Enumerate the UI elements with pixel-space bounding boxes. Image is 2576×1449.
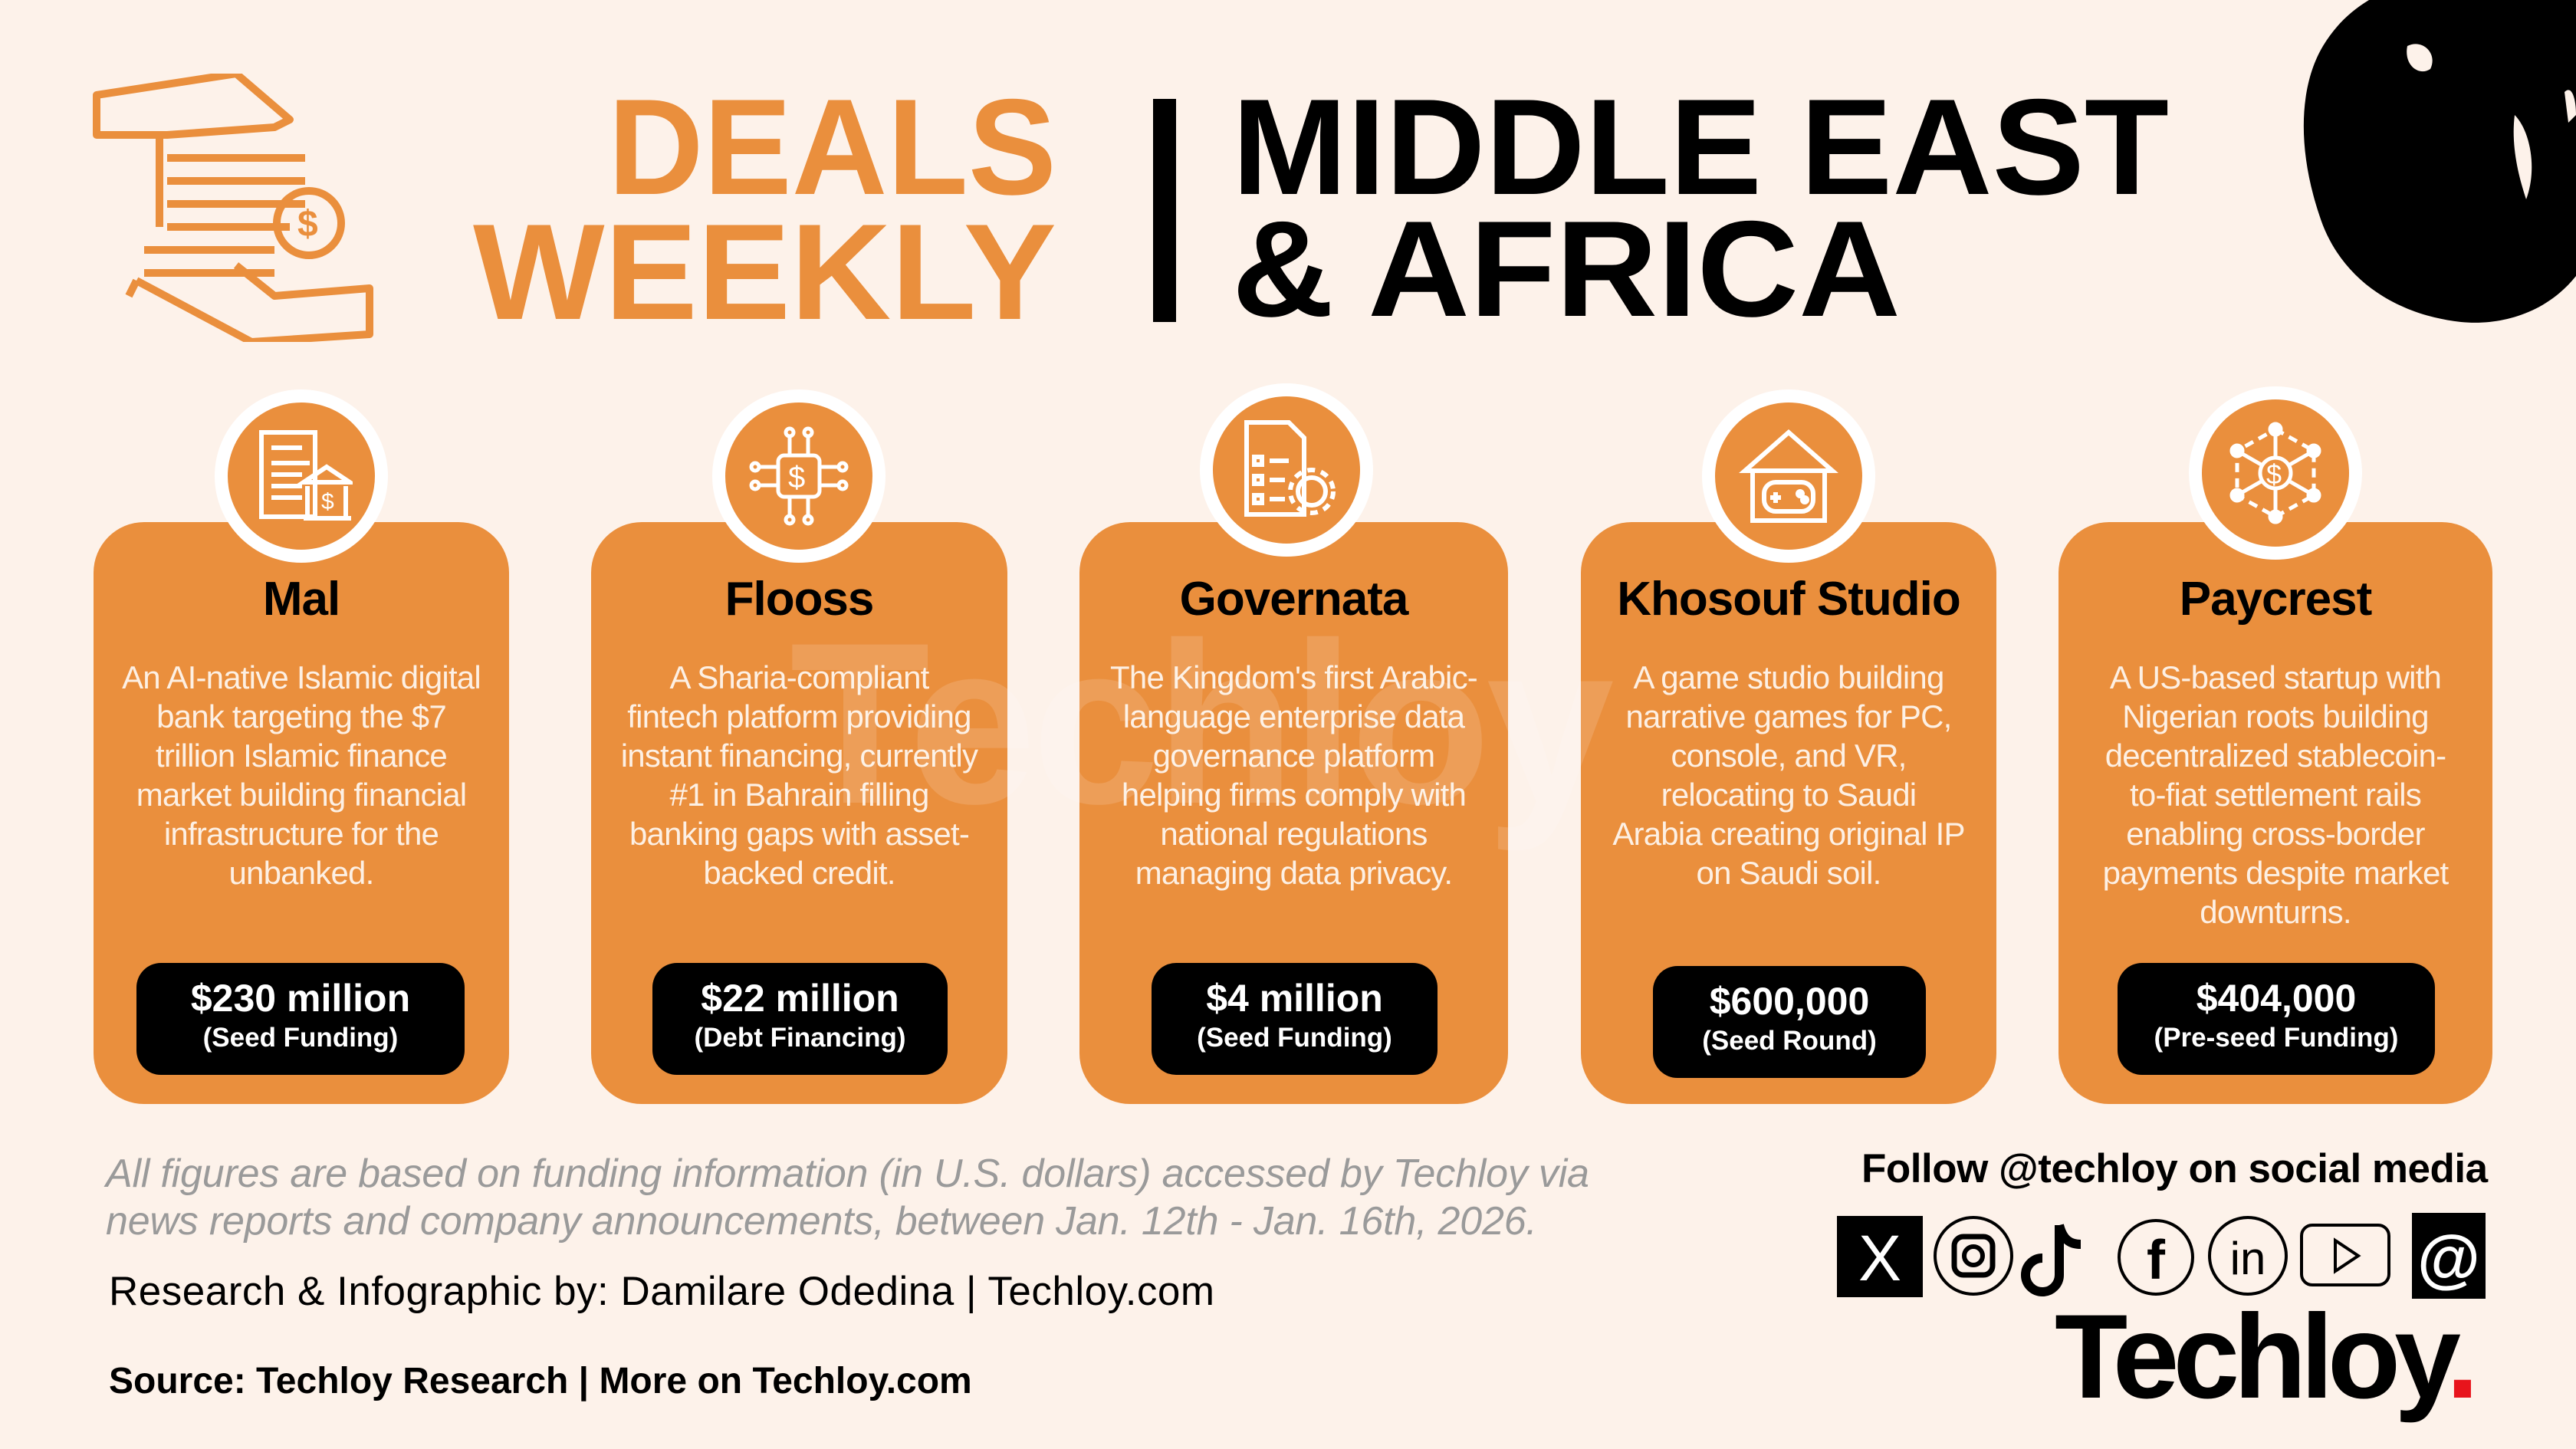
- icon: X: [1837, 1216, 1923, 1297]
- amount: Governata: $4 million: [1206, 977, 1383, 1020]
- footnote: news reports and company announcements, between Jan. 12th - Jan. 16th, 2026.: [106, 1199, 1537, 1244]
- source: Source: Techloy Research | More on Techloy.com: [109, 1361, 972, 1401]
- divider bar: [1153, 99, 1176, 322]
- icon: tiktok: [2026, 1225, 2081, 1292]
- panel icon: Mal: [215, 389, 388, 563]
- icon: globe: [2303, 0, 2576, 323]
- icon: X: X: [1858, 1222, 1901, 1294]
- amount: Khosouf Studio: $600,000: [1710, 980, 1869, 1023]
- panel icon: Khosouf Studio: [1702, 389, 1875, 563]
- description: Mal: [122, 659, 481, 891]
- icon: facebook: f: [2147, 1230, 2166, 1291]
- panel: Flooss: [591, 522, 1007, 1104]
- description: Khosouf Studio: A game studio building: [1633, 659, 1944, 695]
- panel icon: Mal: $: [321, 489, 334, 514]
- watermark: Techloy: [790, 594, 1609, 852]
- name: Paycrest: Paycrest: [2180, 573, 2371, 626]
- description: Paycrest: to-fiat settlement rails: [2130, 777, 2421, 813]
- amount: Governata: (Seed Funding): [1197, 1023, 1392, 1053]
- description: Mal: trillion Islamic finance: [156, 738, 447, 774]
- credits: Research & Infographic by: Damilare Odedina | Techloy.com: [109, 1269, 1215, 1314]
- panel icon: Governata: [1200, 383, 1373, 557]
- description: Mal: market building financial: [136, 777, 466, 813]
- amount: Paycrest: $404,000: [2196, 977, 2356, 1020]
- panel icon: Paycrest: $: [2266, 458, 2282, 490]
- name: Mal: Mal: [263, 573, 340, 626]
- description: Governata: governance platform: [1153, 738, 1434, 774]
- description: Khosouf Studio: narrative games for PC,: [1625, 698, 1952, 734]
- description: Khosouf Studio: [1612, 659, 1965, 891]
- amount: Paycrest: (Pre-seed Funding): [2154, 1023, 2398, 1053]
- panel: Governata: [1079, 522, 1508, 1104]
- description: Flooss: banking gaps with asset-: [629, 816, 969, 852]
- icon: linkedin: [2210, 1217, 2286, 1294]
- panel icon: Flooss: [712, 389, 886, 563]
- description: Governata: The Kingdom's first Arabic-: [1110, 659, 1477, 695]
- description: Governata: managing data privacy.: [1135, 855, 1452, 891]
- description: Khosouf Studio: relocating to Saudi: [1661, 777, 1916, 813]
- amount: Flooss: (Debt Financing): [694, 1023, 906, 1053]
- description: Flooss: [621, 659, 978, 891]
- description: Flooss: backed credit.: [703, 855, 895, 891]
- description: Governata: national regulations: [1160, 816, 1428, 852]
- description: Governata: language enterprise data: [1123, 698, 1464, 734]
- amount: Khosouf Studio: [1653, 966, 1926, 1078]
- name: Khosouf Studio: Khosouf Studio: [1617, 573, 1960, 626]
- panel: Khosouf Studio: [1581, 522, 1996, 1104]
- description: Governata: helping firms comply with: [1122, 777, 1466, 813]
- icon: hand with coins: [93, 74, 373, 342]
- panel: Mal: [94, 522, 509, 1104]
- icon: threads: @: [2417, 1222, 2480, 1294]
- panel: Paycrest: [2058, 522, 2492, 1104]
- amount: Flooss: $22 million: [701, 977, 899, 1020]
- title: DEALS WEEKLY: [473, 84, 1056, 330]
- icon: linkedin: in: [2230, 1233, 2266, 1284]
- description: Paycrest: [2103, 659, 2449, 930]
- amount: Mal: [136, 963, 465, 1075]
- icon: hand with coins: $: [297, 204, 318, 245]
- description: Paycrest: payments despite market: [2103, 855, 2448, 891]
- name: Flooss: Flooss: [725, 573, 873, 626]
- description: Flooss: A Sharia-compliant: [669, 659, 929, 695]
- icon: facebook: [2119, 1221, 2193, 1294]
- amount: Khosouf Studio: (Seed Round): [1702, 1026, 1877, 1056]
- footnote: All figures are based on funding information (in U.S. dollars) accessed by Techloy via: [106, 1152, 1589, 1196]
- amount: Flooss: [652, 963, 948, 1075]
- description: Khosouf Studio: console, and VR,: [1671, 738, 1907, 774]
- description: Mal: bank targeting the $7: [156, 698, 446, 734]
- social heading: Follow @techloy on social media: [1861, 1146, 2488, 1191]
- description: Paycrest: enabling cross-border: [2126, 816, 2425, 852]
- icon: youtube: [2302, 1225, 2389, 1285]
- amount: Mal: $230 million: [191, 977, 410, 1020]
- description: Mal: An AI-native Islamic digital: [122, 659, 481, 695]
- title: MIDDLE EAST & AFRICA: [1232, 84, 2169, 330]
- description: Khosouf Studio: Arabia creating original IP: [1612, 816, 1965, 852]
- description: Flooss: fintech platform providing: [627, 698, 971, 734]
- amount: Governata: [1152, 963, 1438, 1075]
- description: Khosouf Studio: on Saudi soil.: [1697, 855, 1881, 891]
- amount: Mal: (Seed Funding): [203, 1023, 398, 1053]
- description: Paycrest: downturns.: [2200, 894, 2351, 930]
- logo: Techloy: Techloy.: [2055, 1290, 2473, 1424]
- description: Mal: unbanked.: [228, 855, 373, 891]
- description: Mal: infrastructure for the: [164, 816, 439, 852]
- description: Paycrest: decentralized stablecoin-: [2105, 738, 2446, 774]
- description: Flooss: #1 in Bahrain filling: [669, 777, 929, 813]
- description: Governata: [1110, 659, 1477, 891]
- panel icon: Paycrest: [2189, 386, 2362, 560]
- amount: Paycrest: [2118, 963, 2435, 1075]
- name: Governata: Governata: [1180, 573, 1408, 626]
- footnote: [104, 1152, 1589, 1244]
- icon: instagram: [1935, 1217, 2012, 1294]
- description: Flooss: instant financing, currently: [621, 738, 978, 774]
- panel icon: Flooss: $: [788, 461, 805, 495]
- description: Paycrest: A US-based startup with: [2110, 659, 2441, 695]
- social icons: [1837, 1213, 2486, 1299]
- description: Paycrest: Nigerian roots building: [2122, 698, 2429, 734]
